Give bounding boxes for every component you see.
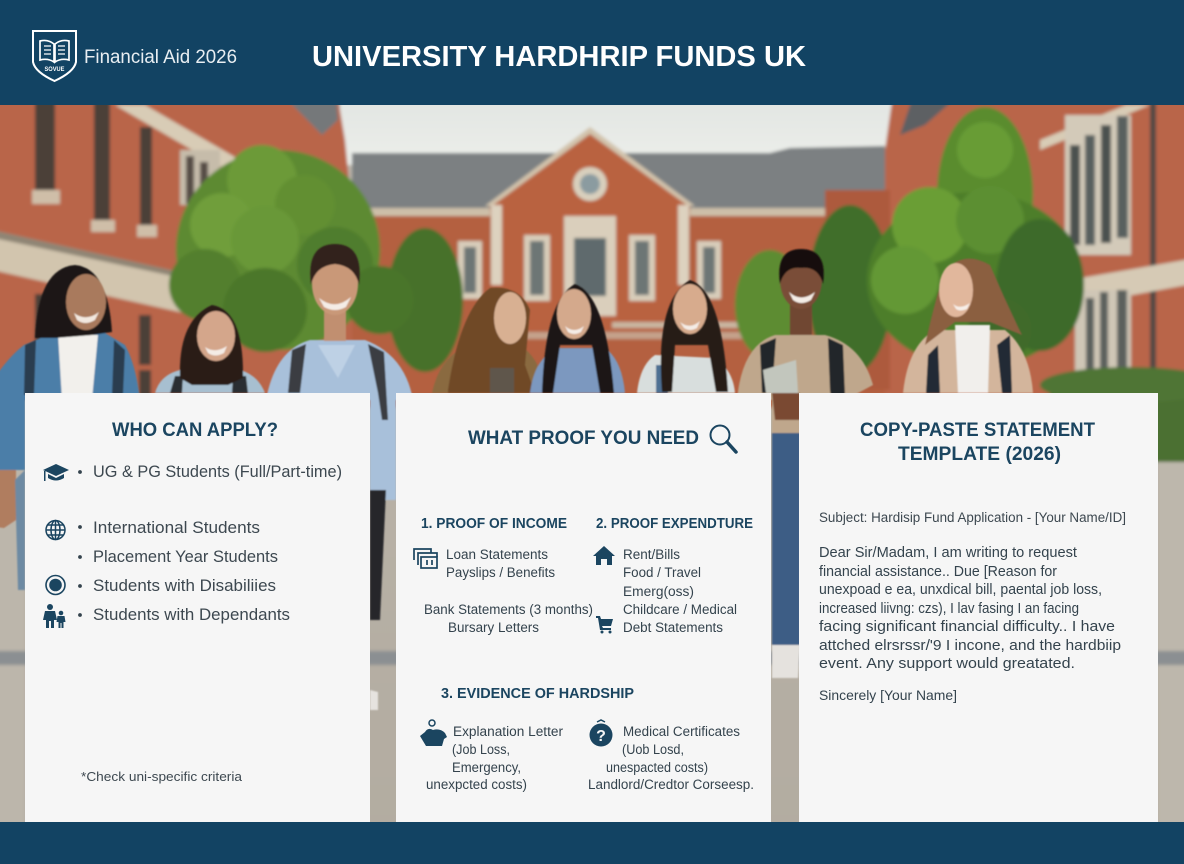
icon: question badge: ?	[596, 728, 606, 745]
paving	[0, 462, 25, 840]
panel: what proof you need	[396, 393, 771, 822]
template body: event. Any support would greatated.	[819, 656, 1075, 672]
expenditure list	[623, 547, 737, 635]
eligibility list: Placement Year Students	[93, 548, 278, 566]
icon: question badge	[590, 720, 612, 746]
icon: statements	[414, 549, 437, 568]
hardship evidence right list: Landlord/Credtor Corseesp.	[588, 777, 754, 792]
expenditure list: Rent/Bills	[623, 547, 680, 562]
income list	[424, 547, 593, 635]
expenditure list: Emerg(oss)	[623, 584, 694, 599]
icon: globe	[46, 520, 65, 540]
template body: unexpoad e ea, unxdical bill, paental job loss,	[819, 582, 1102, 598]
income list: Loan Statements	[446, 547, 548, 562]
expenditure list: Food / Travel	[623, 565, 701, 580]
income list: Bank Statements (3 months)	[424, 602, 593, 617]
income list: Bursary Letters	[448, 620, 539, 635]
icon: disability badge	[46, 576, 65, 594]
students group	[0, 244, 1033, 710]
student 4	[432, 288, 545, 393]
hardship evidence left list: (Job Loss,	[452, 742, 510, 757]
footer bar	[0, 822, 1184, 864]
eligibility list: UG & PG Students (Full/Part-time)	[93, 463, 342, 481]
subheading: evidence of hardship: 3. EVIDENCE OF HARDSHIP	[441, 686, 634, 702]
student 1	[0, 265, 140, 590]
icon: piggy bank	[420, 720, 447, 746]
hardship evidence left list: Emergency,	[452, 760, 521, 775]
panel: statement template	[799, 393, 1158, 822]
template body	[819, 545, 1121, 672]
heading: what proof you need: WHAT PROOF YOU NEED	[468, 428, 699, 449]
eligibility list: Students with Dependants	[93, 606, 290, 624]
student 6	[637, 280, 735, 393]
icon: university shield logo	[33, 31, 76, 81]
icon: magnifier	[710, 426, 736, 452]
hardship evidence left list	[426, 724, 564, 792]
panel: who can apply	[25, 393, 370, 822]
template body: Dear Sir/Madam, I am writing to request	[819, 545, 1077, 561]
template body: facing significant financial difficulty.. I have	[819, 619, 1115, 635]
subheading: proof of income: 1. PROOF OF INCOME	[421, 516, 567, 532]
hardship evidence right list: unespacted costs)	[606, 760, 708, 775]
template body: financial assistance.. Due [Reason for	[819, 564, 1057, 580]
student 7	[737, 249, 873, 678]
expenditure list: Debt Statements	[623, 620, 723, 635]
template body: increased liivng: czs), I lav fasing I an facing	[819, 601, 1079, 617]
footnote: *Check uni-specific criteria	[81, 769, 243, 784]
hardship evidence right list: Medical Certificates	[623, 724, 740, 739]
student 8	[903, 259, 1033, 393]
icon: house	[593, 546, 615, 565]
heading: statement template: TEMPLATE (2026)	[898, 444, 1061, 465]
student 5	[530, 284, 625, 393]
icon: shopping cart	[596, 616, 613, 634]
hardship evidence right list: (Uob Losd,	[622, 742, 684, 757]
template body: attched elrsrssr/'9 I incone, and the hardbiip	[819, 638, 1121, 654]
student 3	[266, 244, 413, 710]
trees	[169, 107, 1084, 375]
logo caption: Financial Aid 2026	[84, 47, 237, 68]
student 2	[155, 305, 265, 393]
template subject line: Subject: Hardisip Fund Application - [Your Name/ID]	[819, 510, 1126, 525]
subheading: proof of expenditure: 2. PROOF EXPENDTURE	[596, 516, 753, 532]
eligibility list: Students with Disabiliies	[93, 577, 276, 595]
title: UNIVERSITY HARDHRIP FUNDS UK	[312, 41, 806, 73]
eligibility list	[78, 463, 342, 624]
income list: Payslips / Benefits	[446, 565, 555, 580]
heading: who can apply: WHO CAN APPLY?	[112, 420, 278, 441]
eligibility list: International Students	[93, 519, 260, 537]
header bar	[0, 0, 1184, 105]
hardship evidence left list: unexpcted costs)	[426, 777, 527, 792]
expenditure list: Childcare / Medical	[623, 602, 737, 617]
heading: statement template: COPY-PASTE STATEMENT	[860, 420, 1095, 441]
icon: graduation cap	[43, 464, 69, 481]
icon: university shield logo: SOVUE	[44, 67, 64, 73]
heading: statement template	[860, 420, 1095, 465]
icon: parent and child	[43, 604, 66, 628]
hardship evidence left list: Explanation Letter	[453, 724, 564, 739]
hardship evidence right list	[588, 724, 754, 792]
template sign-off: Sincerely [Your Name]	[819, 687, 957, 703]
